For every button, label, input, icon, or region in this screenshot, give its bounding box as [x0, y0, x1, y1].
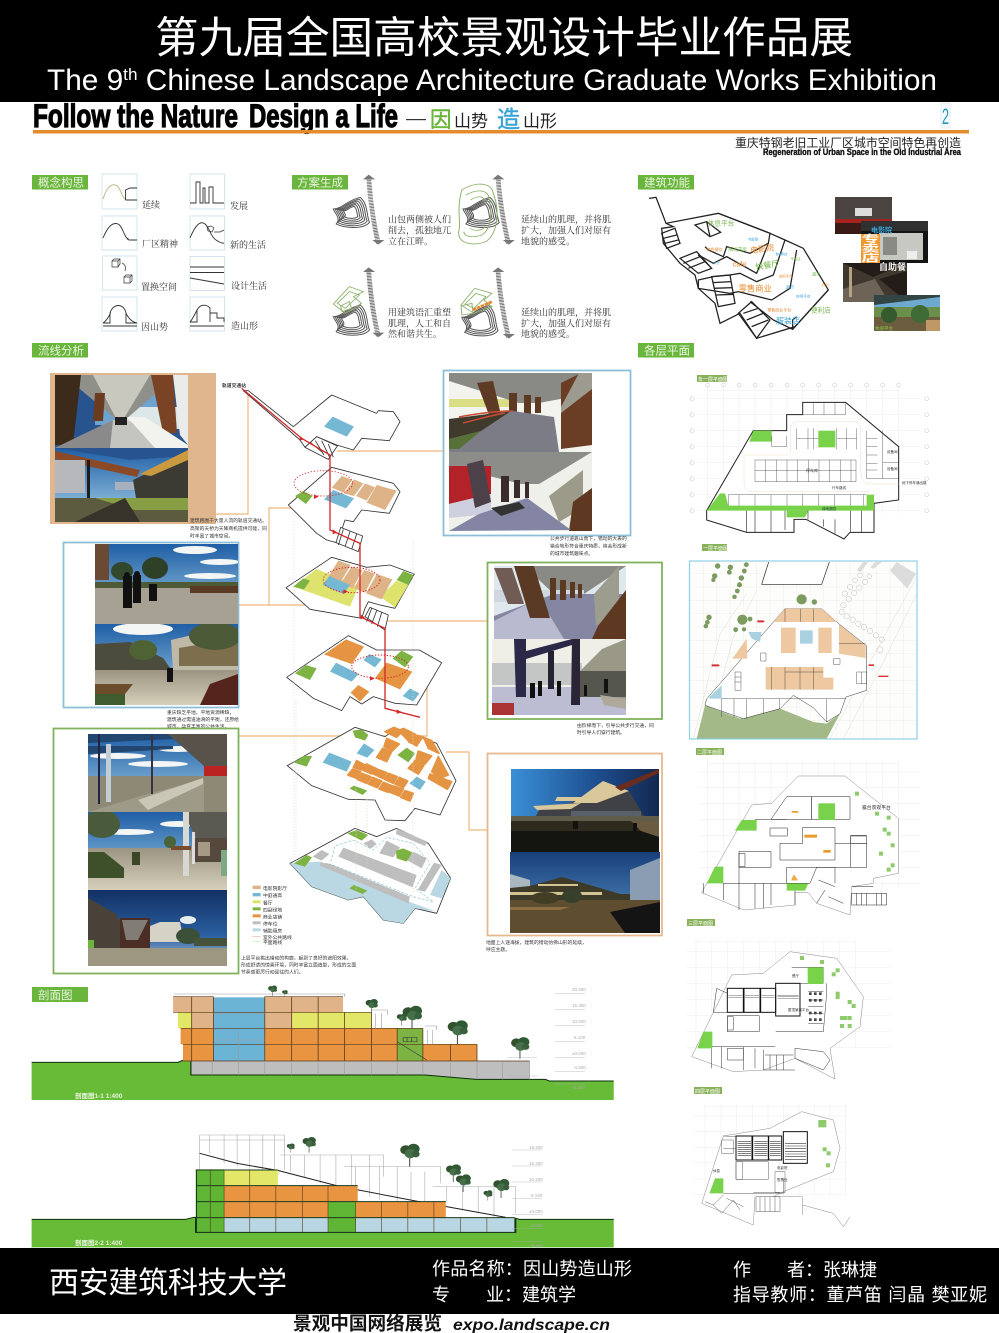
section 2-2 labels: 5.100	[531, 1193, 543, 1198]
4F room labels: 休息	[713, 1168, 720, 1173]
caption: public walkway: 错合地形符合重庆特质，将会形成新	[550, 542, 627, 550]
heading: concept	[32, 175, 88, 190]
heading: building function	[638, 175, 694, 190]
functional axonometric: 休闲平台	[796, 294, 811, 299]
label: B1: 负一层平面图	[698, 376, 728, 383]
title: English: The 9	[47, 64, 122, 97]
functional axonometric: 零售商业	[739, 283, 772, 293]
section 2-2 labels: -8.450	[530, 1243, 543, 1248]
4F room labels: 电影院	[777, 1165, 788, 1170]
functional axonometric: 超市	[812, 270, 820, 276]
photo block: exterior	[488, 754, 662, 936]
step captions: 削去，孤独地兀	[388, 224, 451, 236]
caption: undercroft: 时引导人们穿行建筑。	[577, 729, 625, 736]
section 2-2 labels: 19.400	[529, 1145, 543, 1150]
section 1-1 labels: ±0.000	[572, 1051, 586, 1056]
plan level 4	[287, 636, 442, 711]
function photo collage	[835, 197, 940, 332]
connector lines	[216, 393, 487, 830]
step captions: 延续山的肌理，并将肌	[521, 306, 611, 318]
legend labels: 餐厅	[263, 900, 273, 906]
panel: concept	[32, 174, 267, 332]
website line	[293, 1313, 610, 1333]
function photo collage: 店	[862, 252, 880, 264]
heading: concept: 概念构思	[38, 176, 84, 190]
section 1-1 labels: 剖面图1-1 1:400	[75, 1091, 123, 1100]
B1 room labels: 设备间	[887, 466, 898, 471]
caption: terrace: 形成舒适的惊喜环境，同时丰富立面造型，形成的立面	[241, 962, 356, 968]
plan level 3	[286, 557, 414, 630]
function photo collage: 电影院	[871, 226, 892, 234]
heading: circulation analysis	[32, 343, 88, 358]
heading: scheme generation	[292, 175, 348, 190]
section 2-2 labels: 15.300	[529, 1161, 543, 1166]
B1 room labels: 设备间	[887, 449, 898, 454]
B1 room labels: 停车库	[806, 467, 818, 473]
panel: building function	[638, 175, 940, 338]
caption: public walkway: 公共步行道靠山而下，错动的大表的	[550, 535, 627, 542]
function photo collage: 自助餐	[879, 261, 906, 272]
work info	[432, 1259, 987, 1305]
caption: public walkway: 的城市建筑趣味点。	[550, 550, 593, 557]
concept labels: 延续	[142, 199, 160, 210]
plan level 6	[290, 828, 451, 923]
function photo collage: 专	[862, 232, 880, 246]
caption: elevated passage	[190, 517, 267, 540]
photo block: elevated passage	[50, 373, 216, 524]
project title: 重庆特钢老旧工业厂区城市空间特色再创造	[735, 136, 961, 150]
section 1-1 labels: 20.400	[572, 987, 586, 992]
functional axonometric	[649, 197, 831, 338]
work info: 作品名称：因山势造山形	[432, 1259, 632, 1279]
legend labels: 中庭通高	[263, 892, 282, 899]
work info: 指导教师：董芦笛 闫晶 樊亚妮	[733, 1285, 987, 1305]
caption: terrace	[241, 954, 356, 976]
step diagrams	[333, 175, 515, 339]
heading: sections: 剖面图	[38, 988, 72, 1002]
panel: circulation analysis	[32, 343, 662, 976]
photo block: public walkway	[444, 370, 630, 536]
floor plan: 4F	[693, 1087, 850, 1227]
functional axonometric: 快餐厅	[755, 258, 780, 272]
functional axonometric: 零售商业平台	[767, 306, 791, 312]
label: 3F: 三层平面图	[688, 921, 713, 927]
section 2-2 labels: ±0.000	[529, 1209, 543, 1214]
caption: public walkway	[550, 535, 627, 557]
heading: building function: 建筑功能	[644, 176, 690, 190]
caption: undercroft: 由阶梯而下，引导公共步行交通，同	[577, 722, 654, 729]
plan level 2	[288, 467, 400, 552]
caption: exterior: 地面上人逐海拔，建筑的错动仿佛山形的延续，	[486, 939, 587, 946]
step captions: 地貌的感受。	[521, 236, 575, 246]
theme title: 山势	[454, 112, 488, 131]
floor plan: 3F	[687, 919, 890, 1079]
theme title: 造	[497, 106, 520, 132]
2F terrace label: 露台景观平台	[862, 804, 891, 811]
section 2-2 labels: 剖面图2-2 1:400	[75, 1238, 123, 1247]
label: 4F	[694, 1087, 722, 1095]
caption: terrace: 节奏感更厉行动迎往的人们。	[241, 968, 303, 976]
B1 room labels: 行车路线	[832, 485, 846, 490]
plan level 5	[287, 727, 456, 821]
functional axonometric: 特色餐饮	[707, 246, 723, 252]
section 1-1 labels: -4.500	[573, 1065, 586, 1070]
caption: plaza: 城市，孕育丰富的公共生活。	[167, 723, 229, 730]
caption: plaza: 重庆缺乏平地，平地资源稀缺，	[167, 709, 234, 716]
heading: sections	[32, 987, 88, 1002]
functional axonometric: 专卖店	[791, 256, 801, 261]
project title English: Regeneration of Urban Space in the Old Industrial Area	[763, 147, 962, 157]
caption: elevated passage: 建筑跑圈于大量人流的轨道交通站。	[190, 517, 267, 524]
section 1-1 labels: -8.450	[572, 1085, 585, 1090]
panel: floor plans	[638, 343, 929, 1227]
section 1-1 labels	[75, 987, 586, 1100]
4F room labels	[713, 1165, 788, 1182]
heading: floor plans: 各层平面	[644, 344, 690, 358]
step captions: 用建筑语汇重塑	[388, 306, 451, 318]
title: English: Chinese Landscape Architecture Graduate Works Exhibition	[138, 64, 937, 97]
floor plan: B1	[690, 375, 929, 539]
caption: elevated passage: 时丰富了城市空间。	[190, 532, 233, 540]
heading: scheme generation: 方案生成	[297, 176, 343, 190]
caption: elevated passage: 高架的天桥为天降商机提供可能，同	[190, 525, 267, 532]
work info: 专 业：建筑学	[432, 1285, 576, 1305]
heading: circulation analysis: 流线分析	[38, 344, 84, 358]
concept labels: 发展	[230, 200, 248, 211]
functional axonometric: buffet	[776, 252, 788, 257]
concept labels: 新的生活	[230, 239, 266, 250]
B1 room labels	[806, 449, 927, 511]
step captions: 延续山的肌理，并将肌	[521, 214, 611, 226]
functional axonometric: 办公	[822, 282, 829, 287]
section 2-2 labels	[75, 1145, 543, 1248]
step captions	[388, 214, 611, 339]
university: 西安建筑科技大学	[49, 1267, 287, 1300]
functional axonometric: 服装店	[776, 315, 800, 325]
rail label: 轨道交通站	[222, 382, 246, 389]
3F room labels: 屋顶景观平台	[788, 1007, 809, 1012]
photo block: plaza	[64, 542, 241, 708]
functional axonometric: 便利店	[811, 305, 831, 314]
plan level 1	[243, 391, 400, 459]
work info: 作 者：张琳捷	[733, 1260, 877, 1280]
caption: exterior	[486, 939, 587, 953]
page number	[941, 103, 950, 129]
heading: floor plans	[638, 343, 694, 358]
circulation route in red	[242, 388, 420, 717]
label: 2F	[696, 748, 724, 756]
theme title	[406, 106, 557, 132]
section 2-2 labels: -4.500	[530, 1223, 543, 1228]
theme title: 因	[430, 108, 452, 132]
label: 2F: 二层平面图	[697, 750, 722, 756]
legend labels: 电影院影厅	[263, 885, 287, 892]
step captions: 地貌的感受。	[521, 328, 575, 339]
functional axonometric: 大厅	[713, 260, 721, 265]
label: 3F	[687, 919, 715, 927]
B1 room labels: 地下停车通出路	[902, 480, 927, 485]
floor plan: ground floor	[690, 544, 917, 739]
step captions: 立在江畔。	[388, 236, 433, 246]
title: English: th	[123, 65, 138, 84]
functional axonometric: 休闲平台	[779, 274, 793, 279]
concept labels: 设计生活	[231, 280, 267, 291]
legend labels: 平面路线	[263, 939, 282, 946]
legend	[253, 886, 261, 942]
function photo collage: 卖	[862, 242, 880, 255]
isometric diagram stack	[222, 382, 456, 946]
panel: scheme generation	[292, 175, 611, 339]
section 1-1 labels: 5.100	[574, 1035, 586, 1040]
functional axonometric: cafe	[733, 260, 747, 269]
4F room labels: 售票处	[777, 1177, 788, 1182]
step captions: 肌理，人工和自	[388, 318, 451, 330]
legend labels: 商业店铺	[263, 914, 282, 920]
scale arrows	[369, 177, 508, 337]
legend labels	[263, 885, 292, 946]
step captions: 扩大，加强人们对原有	[521, 224, 611, 236]
caption: plaza	[167, 709, 239, 730]
step captions: 山包两侧被人们	[388, 214, 451, 224]
slogan: Design a Life	[249, 98, 398, 134]
caption: plaza: 建筑通过需道油滑的平衡，还原给	[167, 716, 239, 723]
photo block: terrace	[54, 728, 238, 974]
functional axonometric: 阳光花房	[728, 246, 747, 253]
page number: 2	[942, 104, 949, 129]
B1 room labels: 绿地庭园	[822, 506, 836, 511]
floor plan: 2F	[696, 748, 920, 915]
legend labels: 室外公共路线	[263, 934, 292, 941]
concept labels: 置换空间	[141, 281, 177, 292]
caption: terrace: 上层平台挑出错动的构廊，起到了良好的遮阳效果，	[241, 954, 351, 962]
photo block: undercroft	[488, 562, 662, 719]
3F room labels	[788, 973, 809, 1012]
concept labels: 厂区精神	[142, 238, 178, 249]
panel: sections	[32, 986, 614, 1248]
step captions: 扩大，加强人们对原有	[521, 318, 611, 330]
section 1-1 labels: 10.200	[572, 1019, 586, 1024]
header banner	[0, 0, 999, 102]
legend labels: 辅助用房	[263, 928, 282, 934]
function photo collage: 休闲平台	[875, 325, 893, 332]
section 2-2 labels: 10.200	[529, 1177, 543, 1182]
title: Chinese: 第九届全国高校景观设计毕业作品展	[155, 15, 853, 63]
orange rule	[33, 130, 969, 134]
dotted level guides	[294, 512, 413, 920]
caption: undercroft	[577, 722, 654, 736]
legend labels: 四副绿地	[263, 906, 282, 914]
concept icons	[102, 174, 224, 331]
section drawing 1-1	[32, 986, 614, 1100]
step captions: 然和谐共生。	[388, 328, 442, 339]
functional axonometric: 超市	[786, 284, 794, 290]
poster sub-header	[33, 98, 969, 157]
concept labels: 造山形	[231, 320, 258, 331]
theme title: 山形	[523, 112, 557, 131]
concept labels: 因山势	[141, 321, 168, 332]
functional axonometric: 休息平台	[708, 218, 735, 227]
legend labels: 停车位	[263, 920, 278, 928]
functional axonometric: 电影院	[750, 242, 775, 255]
slogan: Follow the Nature	[33, 98, 238, 134]
label: 4F: 四层平面图	[695, 1089, 720, 1095]
concept labels	[141, 199, 267, 332]
functional axonometric: 电影院	[748, 237, 759, 242]
footer banner	[0, 1248, 999, 1314]
section drawing 2-2	[32, 1135, 614, 1247]
section 1-1 labels: 15.300	[572, 1003, 586, 1008]
caption: exterior: 呼应主题。	[486, 946, 510, 953]
3F room labels: 餐厅	[792, 973, 800, 978]
label: ground floor: 一层平面图	[703, 546, 728, 552]
